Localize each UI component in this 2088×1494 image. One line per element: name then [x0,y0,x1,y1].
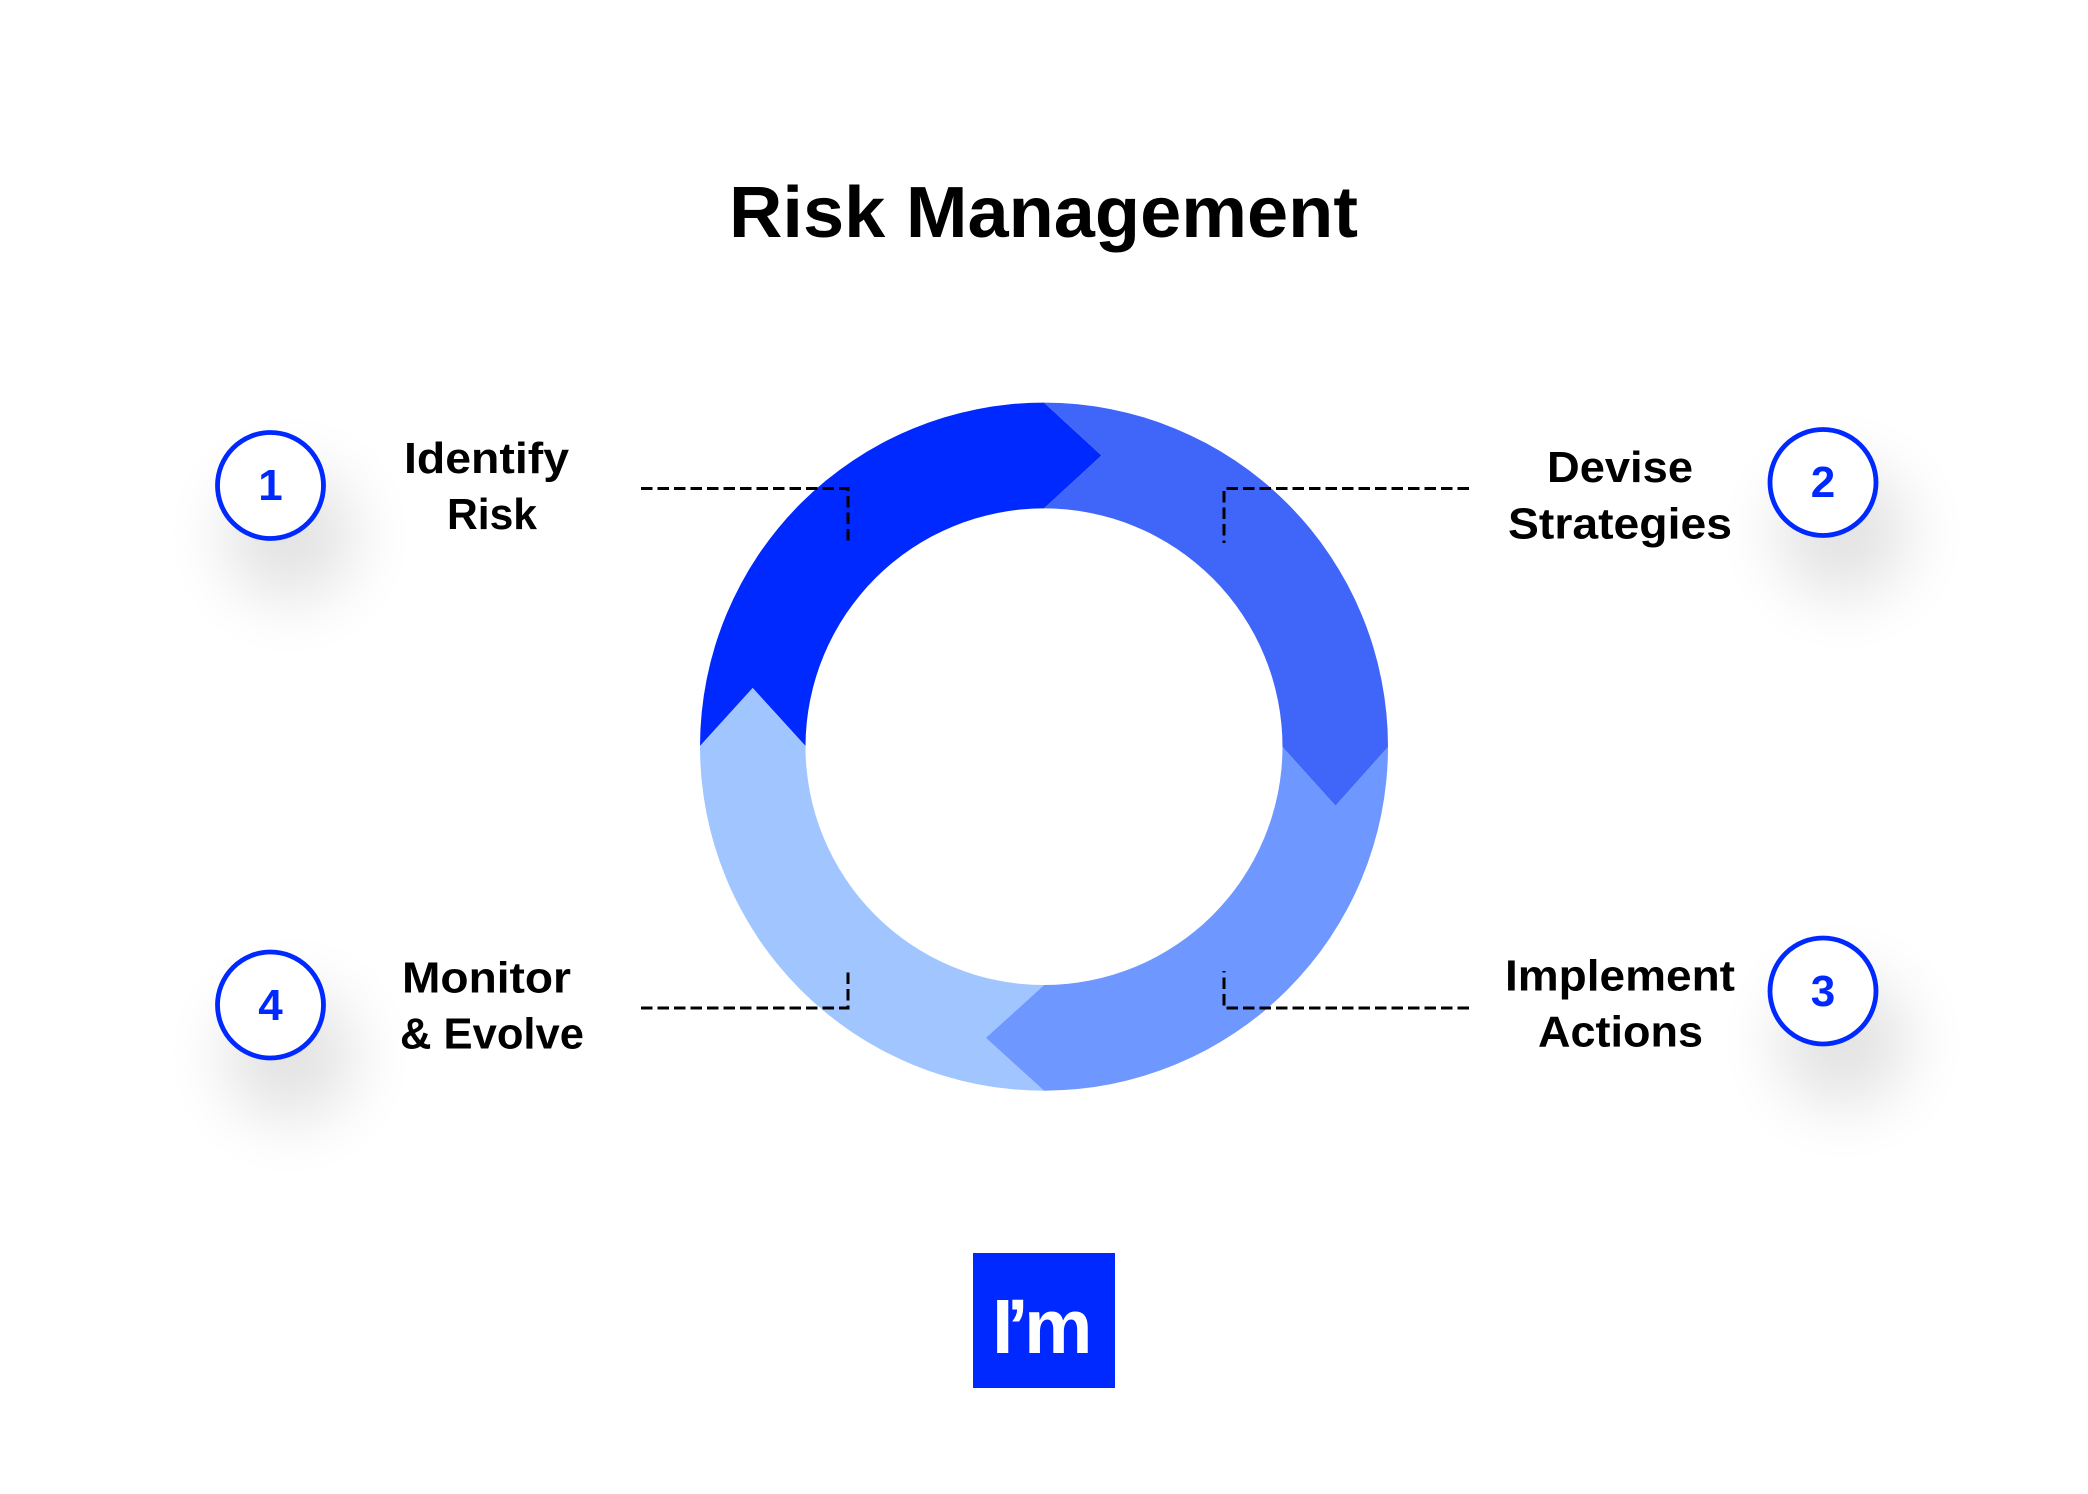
segment: step 1 arrow [700,403,1102,746]
step 1 badge: 1 [258,461,283,510]
segment: step 3 arrow [986,747,1388,1091]
step 2 label: Devise [1547,443,1693,492]
step 4 badge: 4 [258,981,283,1030]
segment: step 2 arrow [1044,403,1388,806]
segment: step 4 arrow [700,688,1044,1091]
step 1 label: Risk [447,490,538,539]
step 4 label [400,954,584,1058]
title: Risk Management [729,173,1358,253]
connector: step 3 [1224,971,1469,1008]
connector: step 2 [1224,488,1469,543]
step 3 label: Implement [1505,952,1735,1000]
step 2 label: Strategies [1508,500,1732,548]
step 3 badge: 3 [1811,967,1835,1016]
step 2 label [1508,443,1732,548]
step 1 badge [218,432,356,601]
step 3 badge [1770,938,1909,1107]
connector: step 1 [641,488,848,543]
step 3 label: Actions [1538,1008,1703,1056]
step 1 label: Identify [404,434,570,483]
step 2 badge: 2 [1811,458,1835,507]
connector: step 4 [641,971,848,1008]
step 4 badge [218,952,356,1121]
step 1 label [404,434,570,539]
logo: I’m [992,1284,1092,1370]
logo [973,1253,1115,1388]
step 4 label: & Evolve [400,1010,584,1058]
step 3 label [1505,952,1735,1056]
step 4 label: Monitor [402,954,571,1002]
ring cycle diagram [700,403,1388,1091]
step 2 badge [1770,430,1909,598]
